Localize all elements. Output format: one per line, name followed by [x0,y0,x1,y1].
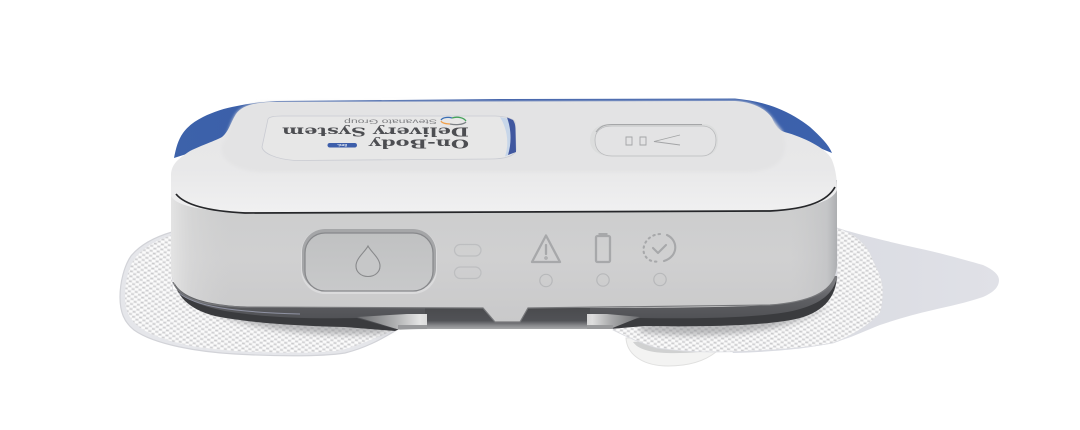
lid [171,101,837,213]
clear channel between clips [425,308,590,329]
release liner tab [700,228,999,353]
status slots [454,244,481,278]
volume badge: 8mL [336,143,347,147]
patch shadow under tray [200,306,396,335]
volume badge [328,143,357,148]
round port under the patch [626,335,716,366]
indicator lights [540,273,666,287]
lid recess [221,101,785,172]
sticker title line 1: On-Body [368,136,469,149]
brand logo mark [441,117,466,125]
adhesive patch: left [120,232,400,356]
icon: water drop [356,246,380,276]
icon: warning triangle [532,236,560,262]
icon: battery [596,233,610,262]
base tray below housing [173,276,837,331]
primary drop button [301,229,437,294]
sticker blue stripe [500,117,516,156]
label sticker [262,116,516,160]
left clear clip [357,314,427,330]
brand name: Stevanato Group [343,118,437,125]
housing body [171,180,837,322]
secondary button with fill symbols [590,124,718,156]
blue rear band [174,98,832,158]
icon: timer check [644,234,675,262]
icon: lines and chevron [626,135,680,145]
adhesive patch: right [613,228,883,352]
sticker title line 2: Delivery System [282,124,469,137]
patch shadow under tray [640,305,830,335]
right clear clip [587,314,640,329]
